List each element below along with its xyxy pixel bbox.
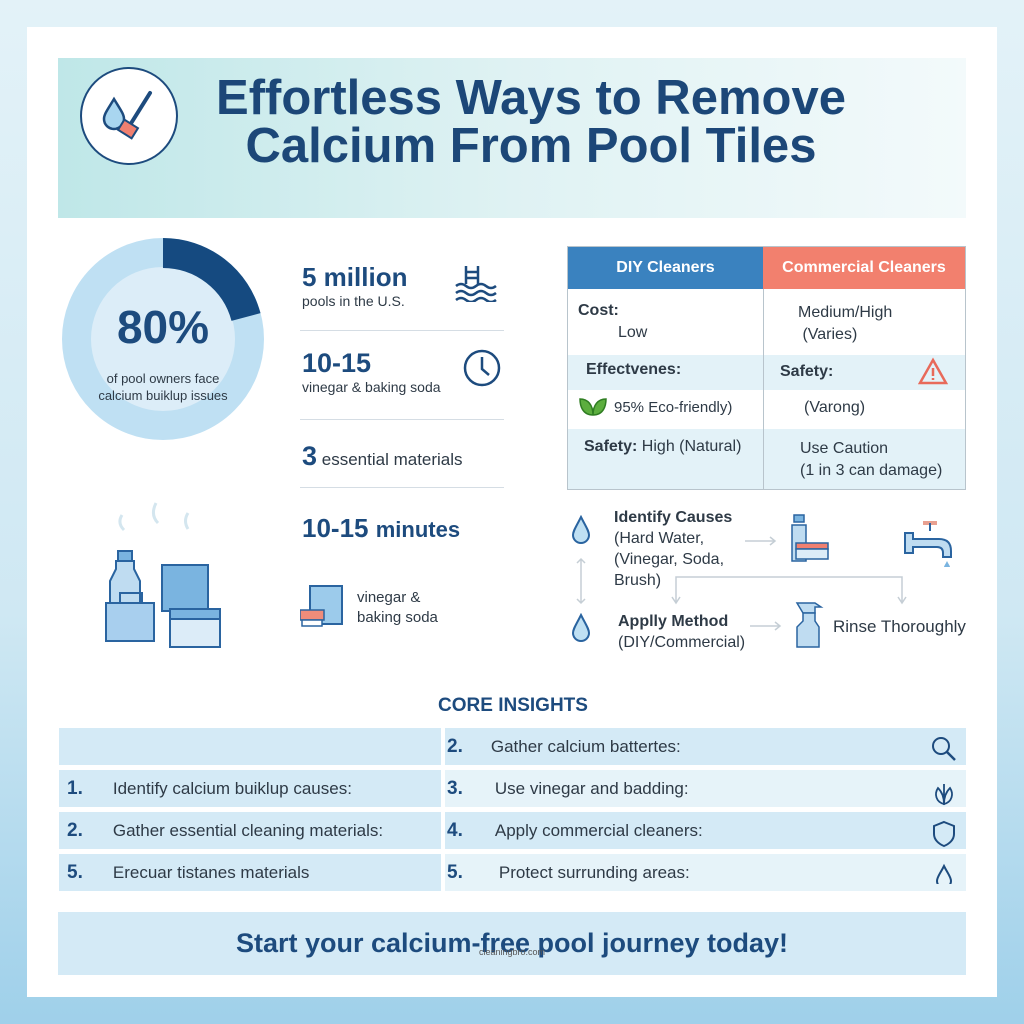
insights list: Protect surrunding areas: <box>499 862 690 882</box>
stats column: vinegar & <box>357 589 420 606</box>
insights list: 2. <box>67 820 83 840</box>
icon: clock <box>464 350 500 386</box>
header: Commercial <box>763 247 965 289</box>
comparison table: (Varong) <box>804 399 865 416</box>
header: DIY: DIY Cleaners <box>616 259 715 276</box>
comparison table: Use Caution <box>800 440 888 457</box>
title <box>216 71 846 173</box>
step: apply method: (DIY/Commercial) <box>618 634 745 651</box>
icon: drop 1 <box>572 515 590 544</box>
insights list <box>59 728 966 891</box>
icon: warning <box>918 358 948 384</box>
step: identify causes: (Hard Water, <box>614 530 704 547</box>
footer call to action <box>58 912 966 975</box>
step: apply method: Applly Method <box>618 613 728 630</box>
insights list: 5. <box>447 862 463 882</box>
process flow: Rinse Thoroughly <box>833 617 966 636</box>
stat: 5 million <box>302 262 407 309</box>
stats column <box>300 262 504 627</box>
step: identify causes: Identify Causes <box>614 509 732 526</box>
step: identify causes: (Vinegar, Soda, <box>614 551 724 568</box>
icon: pool waves <box>455 266 497 302</box>
stat: 10-15: vinegar & baking soda <box>302 379 441 395</box>
connector <box>672 576 906 604</box>
step: apply method <box>618 613 745 651</box>
comparison table: Medium/High <box>798 304 892 321</box>
icons: row icons <box>932 737 956 884</box>
core insights heading: CORE INSIGHTS <box>438 695 588 716</box>
insights list: Erecuar tistanes materials <box>113 862 309 882</box>
comparison table: Effectvenes: <box>586 361 681 378</box>
stat: 3 materials: 3 essential materials <box>302 441 463 471</box>
title: Calcium From Pool Tiles <box>246 119 816 173</box>
header band <box>58 58 966 218</box>
insights list: Apply commercial cleaners: <box>495 820 703 840</box>
insights list: 2. <box>447 736 463 756</box>
step: identify causes <box>614 509 732 589</box>
comparison table: Cost: <box>578 302 619 319</box>
stat: 5 million: 5 million <box>302 262 407 292</box>
icon: bottle and brush <box>791 514 829 562</box>
arrow: vertical <box>576 558 586 604</box>
process flow <box>572 509 966 651</box>
footer call to action: Start your calcium-free pool journey today! <box>236 928 788 958</box>
insights list: Gather essential cleaning materials: <box>113 820 383 840</box>
footer call to action: cleaningbro.com <box>479 947 545 957</box>
icon: drop 2 <box>572 613 590 642</box>
comparison table <box>567 246 966 490</box>
icon: faucet <box>904 521 952 567</box>
comparison table: (1 in 3 can damage) <box>800 462 942 479</box>
insights list: 3. <box>447 778 463 798</box>
header: DIY <box>568 247 763 289</box>
insights list: 1. <box>67 778 83 798</box>
arrow <box>745 536 776 546</box>
insights list: Identify calcium buiklup causes: <box>113 778 352 798</box>
header: Commercial: Commercial Cleaners <box>782 259 946 276</box>
illustration: cleaning supplies <box>105 502 221 648</box>
icon: soda box with brush <box>300 585 343 627</box>
insights list: Gather calcium battertes: <box>491 736 681 756</box>
title: Effortless Ways to Remove <box>216 71 846 125</box>
insights list: 4. <box>447 820 463 840</box>
step: identify causes: Brush) <box>614 572 661 589</box>
comparison table: 95% Eco-friendly) <box>614 399 732 416</box>
donut chart: 80% <box>62 238 264 440</box>
donut chart: 80%: calcium buiklup issues <box>98 388 228 403</box>
comparison table: Safety: <box>780 363 833 380</box>
insights list: Use vinegar and badding: <box>495 778 689 798</box>
insights list: 5. <box>67 862 83 882</box>
icon: spray bottle <box>796 602 824 648</box>
stat: 10-15 <box>302 348 441 395</box>
stat: 10-15: 10-15 <box>302 348 371 378</box>
icon: leaves <box>579 398 607 416</box>
stat: 10-15 minutes: 10-15 minutes <box>302 513 460 543</box>
stats column: baking soda <box>357 609 438 626</box>
donut chart: 80%: 80% <box>117 301 209 353</box>
stat: 5 million: pools in the U.S. <box>302 293 405 309</box>
icon: drop and brush <box>80 67 178 165</box>
comparison table: Safety: High (Natural) <box>584 438 741 455</box>
comparison table: (Varies) <box>802 326 857 343</box>
comparison table: Low <box>618 324 647 341</box>
donut chart: 80%: of pool owners face <box>107 371 219 386</box>
